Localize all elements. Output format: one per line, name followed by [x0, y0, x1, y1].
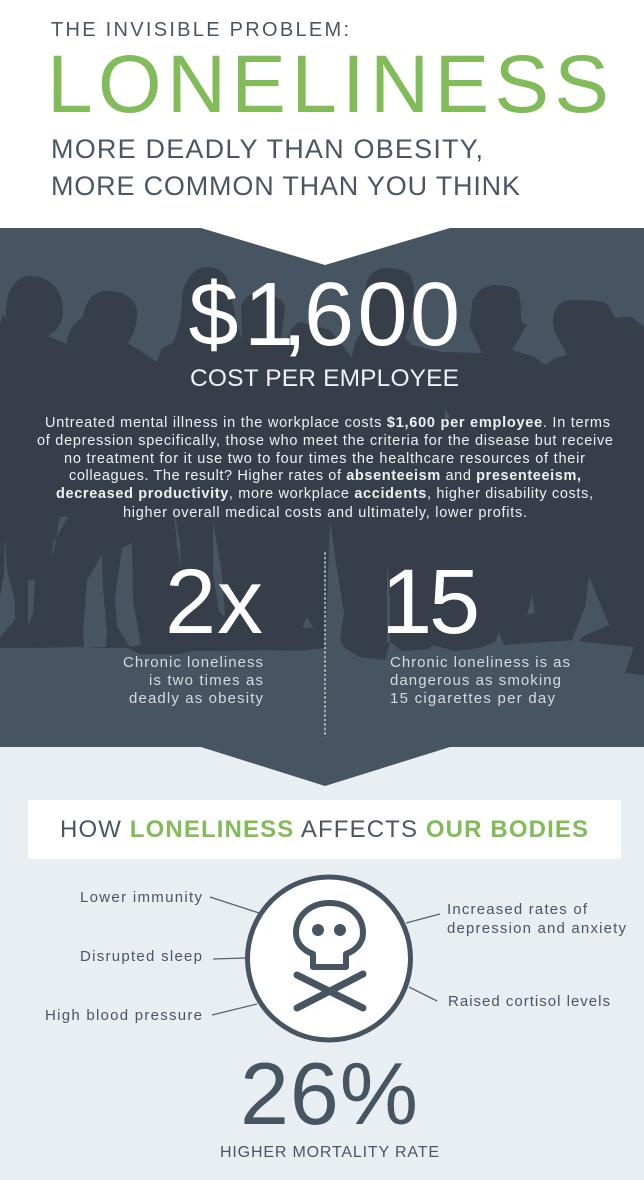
heading background [28, 800, 621, 859]
stat label: COST PER EMPLOYEE [190, 365, 459, 392]
effect labels: depression and anxiety [447, 920, 626, 937]
gaps between legs [0, 408, 609, 650]
panel background with chevrons [0, 228, 644, 786]
body paragraph: of depression specifically, those who meet the criteria for the disease but receive [37, 433, 613, 449]
effect labels: Increased rates of [447, 901, 588, 918]
effect labels [45, 889, 626, 1024]
description: Chronic loneliness is as [390, 654, 570, 671]
kicker: THE INVISIBLE PROBLEM: [51, 19, 349, 41]
diagram: effects on the body [45, 877, 626, 1040]
subtitle line one: MORE DEADLY THAN OBESITY, [51, 134, 483, 164]
body paragraph: colleagues. The result? Higher rates of absenteeism and presenteeism, [69, 468, 581, 484]
connector lines [210, 897, 440, 1015]
body paragraph: higher overall medical costs and ultimately, lower profits. [123, 505, 527, 521]
panel: cost per employee [0, 228, 644, 786]
stat: $1,600: $1,600 [188, 265, 460, 365]
body paragraph: no treatment for it use two to four times the healthcare resources of their [64, 451, 585, 467]
stat: 15 [381, 551, 570, 707]
silhouette of crowd [0, 267, 644, 675]
description: Chronic loneliness [123, 654, 263, 671]
description: dangerous as smoking [390, 672, 561, 689]
header [47, 19, 609, 201]
body paragraph: decreased productivity, more workplace accidents, higher disability costs, [56, 486, 593, 502]
effect labels: Lower immunity [80, 889, 202, 906]
stat: 2x [123, 551, 264, 707]
number: 15 [381, 551, 480, 653]
effect labels: Disrupted sleep [80, 948, 202, 965]
description [390, 654, 570, 707]
section heading box [28, 800, 621, 859]
body paragraph: Untreated mental illness in the workplace costs $1,600 per employee. In terms [45, 415, 610, 431]
description: is two times as [149, 672, 263, 689]
dashed divider [324, 552, 326, 737]
number: 2x [165, 551, 263, 653]
subtitle line two: MORE COMMON THAN YOU THINK [51, 171, 520, 201]
description: deadly as obesity [129, 690, 264, 707]
icon: skull and crossbones [248, 877, 410, 1040]
page background: lower section [0, 747, 644, 1180]
body paragraph [37, 415, 613, 521]
description [123, 654, 264, 707]
description: 15 cigarettes per day [390, 690, 556, 707]
effect labels: High blood pressure [45, 1007, 202, 1024]
heading text: HOW LONELINESS AFFECTS OUR BODIES [60, 816, 588, 843]
title: loneliness: LONELINESS [47, 39, 609, 130]
effect labels: Raised cortisol levels [448, 993, 610, 1010]
stat label: mortality: HIGHER MORTALITY RATE [220, 1144, 439, 1161]
stat: 26%: 26% [240, 1044, 418, 1143]
